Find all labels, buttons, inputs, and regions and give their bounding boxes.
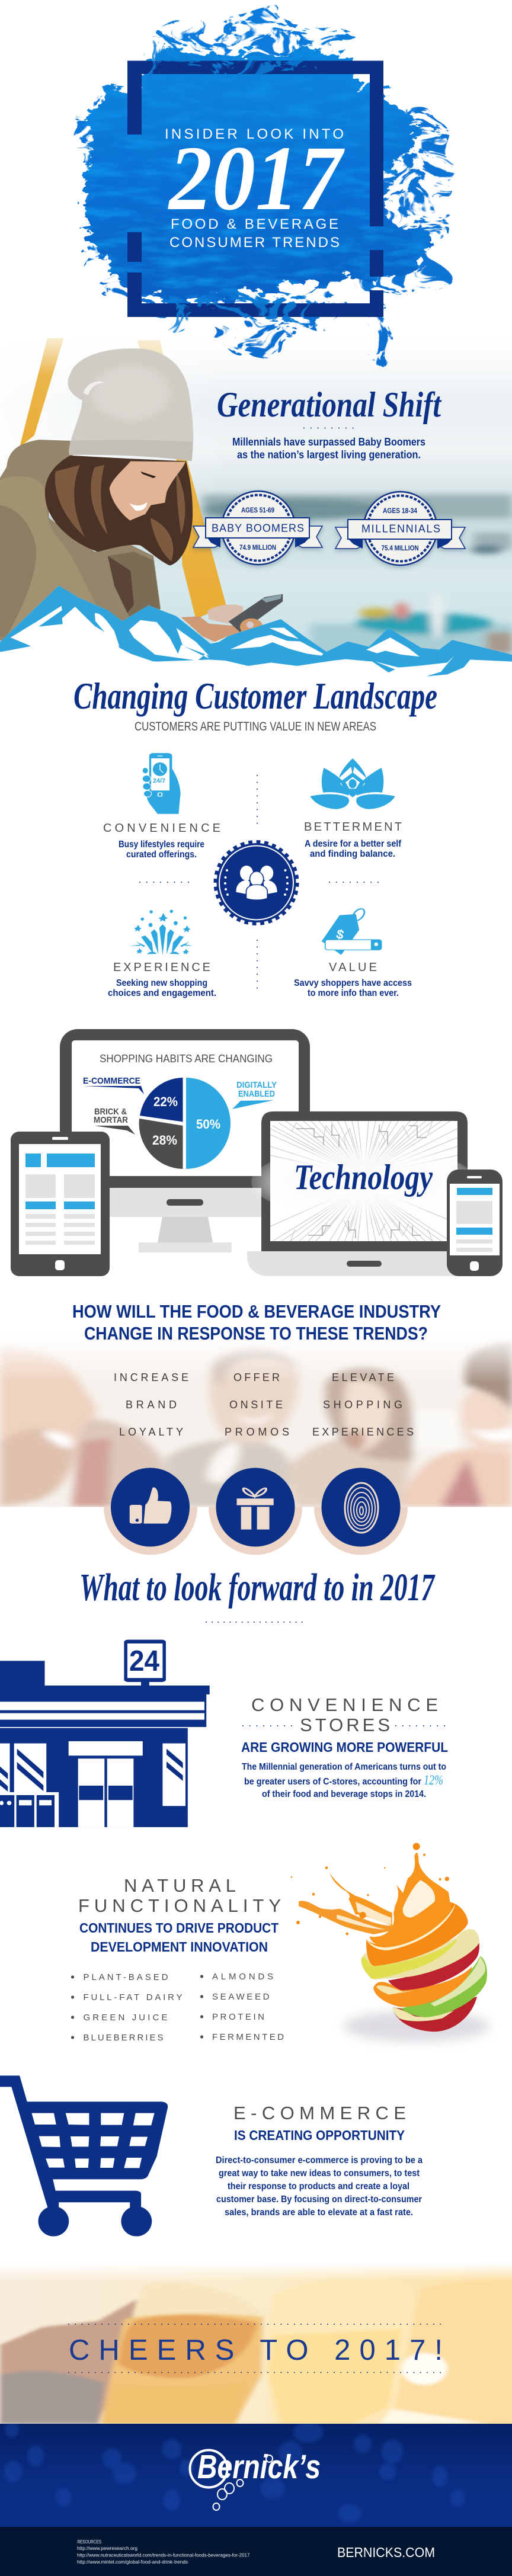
logo: Bernick's: Bernick’s <box>197 2448 321 2486</box>
heading: how will the industry change: CHANGE IN RESPONSE TO THESE TRENDS? <box>84 1323 428 1344</box>
panel: betterment: BETTERMENT <box>304 821 402 834</box>
panel: convenience: CONVENIENCE <box>103 822 220 835</box>
panel: experience: EXPERIENCE <box>113 961 210 974</box>
text: natural functionality heading: CONTINUES TO DRIVE PRODUCT <box>79 1920 279 1936</box>
heading: changing customer landscape <box>73 675 437 733</box>
panel: convenience stores: 24 <box>129 1645 159 1677</box>
panel: value: $ <box>335 926 345 943</box>
column: elevate shopping experiences: EXPERIENCES <box>312 1426 414 1438</box>
list: right column: FERMENTED <box>212 2032 284 2042</box>
icon: fingerprint circle <box>314 1468 408 1555</box>
panel: value: VALUE <box>329 961 377 974</box>
column: increase brand loyalty: BRAND <box>126 1399 177 1411</box>
text: natural functionality heading: DEVELOPMENT INNOVATION <box>91 1939 268 1955</box>
logo: Bernick's <box>190 2448 321 2510</box>
phone <box>447 1170 503 1276</box>
icon: phone in hand <box>142 753 181 814</box>
pie labels: BRICK & <box>94 1107 127 1117</box>
badge: baby boomers: AGES 51-69 <box>241 506 274 514</box>
panel: experience <box>108 910 216 998</box>
column: increase brand loyalty: INCREASE <box>114 1372 188 1383</box>
text: e-commerce copy: their response to products and create a loyal <box>228 2181 409 2191</box>
badge: baby boomers: BABY BOOMERS <box>212 523 304 534</box>
badge: millennials: AGES 18-34 <box>383 507 417 515</box>
text: website: BERNICKS.COM <box>337 2545 435 2560</box>
text: convenience stores copy: 12% <box>424 1773 443 1787</box>
panel: generational shift photo background <box>0 338 512 669</box>
panel: convenience stores <box>0 1640 448 1827</box>
navy frame <box>127 60 383 317</box>
text: e-commerce copy: IS CREATING OPPORTUNITY <box>234 2128 405 2143</box>
list: left column <box>71 1972 183 2043</box>
pie labels: ENABLED <box>238 1089 275 1099</box>
heading: generational shift: Generational Shift <box>217 385 442 424</box>
tablet <box>11 1132 110 1276</box>
pie labels: MORTAR <box>94 1115 128 1125</box>
badge: millennials: 75.4 MILLION <box>382 544 418 552</box>
icon: lotus <box>310 758 395 809</box>
text: generational shift summary: Millennials have surpassed Baby Boomers <box>232 436 425 448</box>
list: right column <box>200 1972 284 2042</box>
text: e-commerce copy: Direct-to-consumer e-commerce is proving to be a <box>216 2155 423 2165</box>
icon: price tag with search bar <box>322 908 382 955</box>
heading: how will the industry change: HOW WILL THE FOOD & BEVERAGE INDUSTRY <box>72 1301 441 1322</box>
dotted divider <box>304 428 353 429</box>
column: offer onsite promos: ONSITE <box>229 1399 283 1411</box>
column: elevate shopping experiences: SHOPPING <box>323 1399 402 1411</box>
list: left column: BLUEBERRIES <box>83 2033 164 2043</box>
icon: convenience store <box>0 1640 210 1827</box>
pie chart: 22% <box>153 1094 178 1109</box>
icon: group of people <box>236 866 277 900</box>
badge: millennials <box>335 492 465 565</box>
photo: clinking beer mugs <box>0 2263 512 2424</box>
hero: paint splash with frame and title: 2017 <box>168 127 345 229</box>
pie chart: 50% <box>196 1117 220 1132</box>
text: resources <box>77 2539 250 2565</box>
heading: how will the industry change <box>72 1301 441 1344</box>
text: convenience stores copy: CONVENIENCE <box>251 1694 438 1715</box>
list: left column: PLANT-BASED <box>83 1972 168 1982</box>
text: convenience stores copy: The Millennial generation of Americans turns out to <box>242 1762 446 1772</box>
hero: paint splash with frame and title <box>75 11 450 360</box>
icon: thumbs up circle <box>104 1468 197 1555</box>
monitor with pie chart <box>60 1029 310 1252</box>
text: natural functionality heading <box>78 1875 281 1955</box>
panel: experience: Seeking new shopping <box>116 978 207 988</box>
text: convenience stores copy: STORES <box>300 1715 390 1735</box>
text: e-commerce copy: E-COMMERCE <box>233 2103 406 2123</box>
text: convenience stores copy: of their food and beverage stops in 2014. <box>262 1789 426 1799</box>
woman <box>0 348 193 640</box>
panel: people photo background <box>0 1340 512 1507</box>
panel: convenience: curated offerings. <box>126 850 197 860</box>
text: e-commerce copy <box>216 2103 423 2218</box>
pie chart: 28% <box>152 1133 177 1148</box>
column: offer onsite promos: OFFER <box>233 1372 280 1383</box>
paint over frame <box>155 50 327 320</box>
yellow poles <box>20 338 226 620</box>
pie chart <box>139 1078 231 1169</box>
text: generational shift summary: as the nation’s largest living generation. <box>237 449 421 461</box>
paint splatter <box>75 11 450 360</box>
text: convenience stores copy <box>241 1694 448 1799</box>
text: convenience stores copy: be greater users of C-stores, accounting for <box>244 1777 421 1787</box>
list: right column: PROTEIN <box>212 2012 264 2022</box>
heading: changing customer landscape: CUSTOMERS ARE PUTTING VALUE IN NEW AREAS <box>135 720 376 733</box>
panel: technology devices <box>11 1029 503 1276</box>
icon: gift circle <box>209 1468 302 1555</box>
panel: betterment <box>304 758 402 859</box>
panel: betterment: and finding balance. <box>310 849 395 859</box>
panel: value: to more info than ever. <box>308 988 399 998</box>
panel: value <box>294 908 412 998</box>
column: increase brand loyalty <box>114 1372 188 1438</box>
panel: value: Savvy shoppers have access <box>294 978 412 988</box>
text: generational shift summary <box>232 436 425 461</box>
hand and phone <box>181 594 283 645</box>
list: right column: SEAWEED <box>212 1992 270 2002</box>
column: elevate shopping experiences: ELEVATE <box>332 1372 394 1383</box>
panel: betterment: A desire for a better self <box>305 839 402 849</box>
text: e-commerce copy: great way to take new ideas to consumers, to test <box>219 2168 420 2178</box>
text: e-commerce copy: customer base. By focusing on direct-to-consumer <box>216 2194 422 2205</box>
monitor with pie chart: SHOPPING HABITS ARE CHANGING <box>100 1052 273 1065</box>
badge: baby boomers <box>193 491 322 565</box>
hero: paint splash with frame and title: FOOD & BEVERAGE <box>171 216 338 232</box>
icon: shopping cart <box>0 2075 168 2237</box>
panel: cheers to 2017 <box>0 2263 512 2424</box>
text: cheers to 2017: CHEERS TO 2017! <box>69 2334 443 2366</box>
pie labels: DIGITALLY <box>236 1080 277 1090</box>
badge: millennials: MILLENNIALS <box>361 523 440 534</box>
panel: natural functionality <box>71 1843 490 2043</box>
column: offer onsite promos <box>225 1372 289 1438</box>
panel: experience: choices and engagement. <box>108 988 216 998</box>
text: resources: http://www.nutraceuticalsworld.com/trends-in-functional-foods-beverages-for-2017 <box>77 2552 250 2558</box>
hero: paint splash with frame and title: CONSUMER TRENDS <box>169 235 340 251</box>
column: offer onsite promos: PROMOS <box>225 1426 289 1438</box>
list: left column: GREEN JUICE <box>83 2013 167 2023</box>
text: resources: http://www.pewresearch.org <box>77 2545 137 2551</box>
panel: convenience: Busy lifestyles require <box>119 840 204 850</box>
text: resources: http://www.mintel.com/global-food-and-drink-trends <box>77 2559 188 2565</box>
text: natural functionality heading: NATURAL <box>124 1875 236 1896</box>
icon: snowy mountain range <box>0 585 512 691</box>
list: right column: ALMONDS <box>212 1972 273 1982</box>
image: sliced fruit with juice splash <box>291 1843 490 2042</box>
laptop with technology screen: Technology <box>294 1158 433 1197</box>
pie labels: E-COMMERCE <box>83 1076 140 1086</box>
title lines: INSIDER LOOK INTO <box>165 126 344 142</box>
panel: navy brand band <box>0 2421 512 2527</box>
column: increase brand loyalty: LOYALTY <box>119 1426 183 1438</box>
text: natural functionality heading: FUNCTIONALITY <box>78 1895 281 1916</box>
footer <box>0 2527 512 2576</box>
text: e-commerce copy: sales, brands are able to elevate at a fast rate. <box>225 2207 413 2218</box>
text: convenience stores copy: ARE GROWING MORE POWERFUL <box>241 1739 448 1755</box>
text: resources: RESOURCES <box>77 2539 101 2545</box>
panel: convenience: 24/7 <box>153 778 165 784</box>
list: left column: FULL-FAT DAIRY <box>83 1992 183 2003</box>
panel: convenience <box>103 753 220 860</box>
laptop with technology screen <box>247 1111 476 1276</box>
badge: customers seal <box>216 842 297 923</box>
column: elevate shopping experiences <box>312 1372 414 1438</box>
pie labels <box>83 1076 277 1135</box>
paint blob <box>84 47 427 302</box>
panel: e-commerce <box>0 2075 423 2237</box>
icon: fireworks <box>130 910 193 955</box>
badge: baby boomers: 74.9 MILLION <box>239 543 276 552</box>
